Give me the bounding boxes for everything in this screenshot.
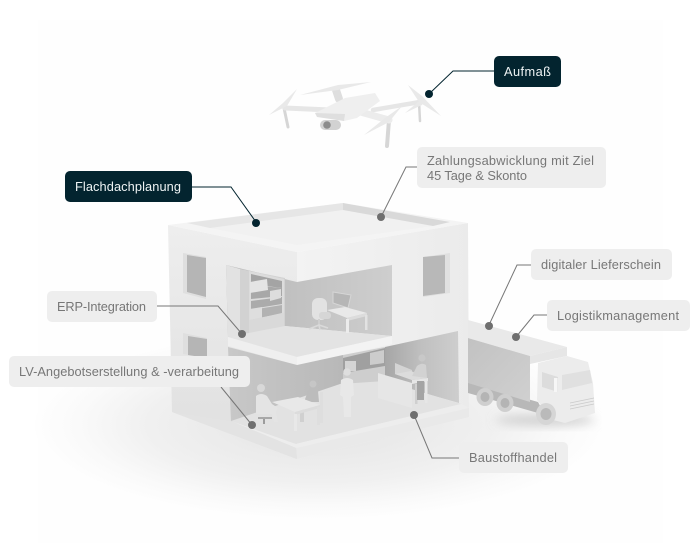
callout: Zahlungsabwicklung: 45 Tage & Skonto	[427, 168, 527, 183]
callout: Logistikmanagement	[512, 300, 690, 341]
bookshelf	[249, 271, 284, 335]
standing person	[340, 368, 354, 417]
lower room	[172, 331, 469, 459]
drone body	[315, 93, 380, 121]
drone arms	[285, 90, 420, 120]
callout: digitaler Lieferschein	[485, 249, 672, 330]
drone legs	[284, 102, 420, 146]
truck container	[468, 320, 567, 402]
building right face	[297, 223, 469, 459]
office chair	[309, 298, 331, 330]
illustration: building	[168, 203, 469, 459]
callout: digitaler Lieferschein: digitaler Lieferschein	[541, 257, 661, 272]
truck cab	[537, 356, 595, 423]
truck wheels	[476, 388, 514, 412]
callout: ERP-Integration	[47, 291, 246, 338]
meeting table and people	[256, 380, 323, 431]
drone camera	[320, 120, 341, 130]
callout: Aufmaß	[425, 56, 561, 98]
upper floor slab	[228, 326, 392, 365]
building left face	[168, 225, 297, 459]
callout: Zahlungsabwicklung	[377, 147, 606, 221]
callout: Baustoffhandel: Baustoffhandel	[469, 450, 557, 465]
callout: Flachdachplanung: Flachdachplanung	[75, 179, 181, 194]
desk and monitor	[327, 292, 368, 333]
illustration: truck	[468, 320, 595, 426]
callout: Zahlungsabwicklung: Zahlungsabwicklung mit Ziel	[427, 153, 594, 168]
callout: LV-Angebotserstellung	[9, 356, 256, 429]
drone propellers	[269, 82, 441, 135]
lower floor	[231, 381, 461, 444]
callout: Logistikmanagement: Logistikmanagement	[557, 308, 679, 323]
roof	[168, 203, 468, 252]
callout: LV-Angebotserstellung: LV-Angebotserstellung & -verarbeitung	[19, 364, 239, 379]
callout: Flachdachplanung	[65, 171, 260, 227]
callout: Baustoffhandel	[410, 411, 568, 473]
lower shelf	[343, 348, 385, 373]
callout: ERP-Integration: ERP-Integration	[57, 299, 146, 314]
counter with monitor	[378, 363, 428, 408]
callout: Aufmaß: Aufmaß	[504, 64, 551, 79]
illustration: drone	[269, 82, 441, 146]
window lower left	[183, 333, 207, 358]
upper room	[226, 265, 392, 365]
truck front wheel	[536, 403, 556, 425]
window upper right	[423, 253, 450, 297]
ground shadow	[35, 330, 605, 520]
truck chassis	[468, 382, 545, 415]
window upper left	[183, 253, 206, 299]
person at counter	[412, 354, 427, 400]
